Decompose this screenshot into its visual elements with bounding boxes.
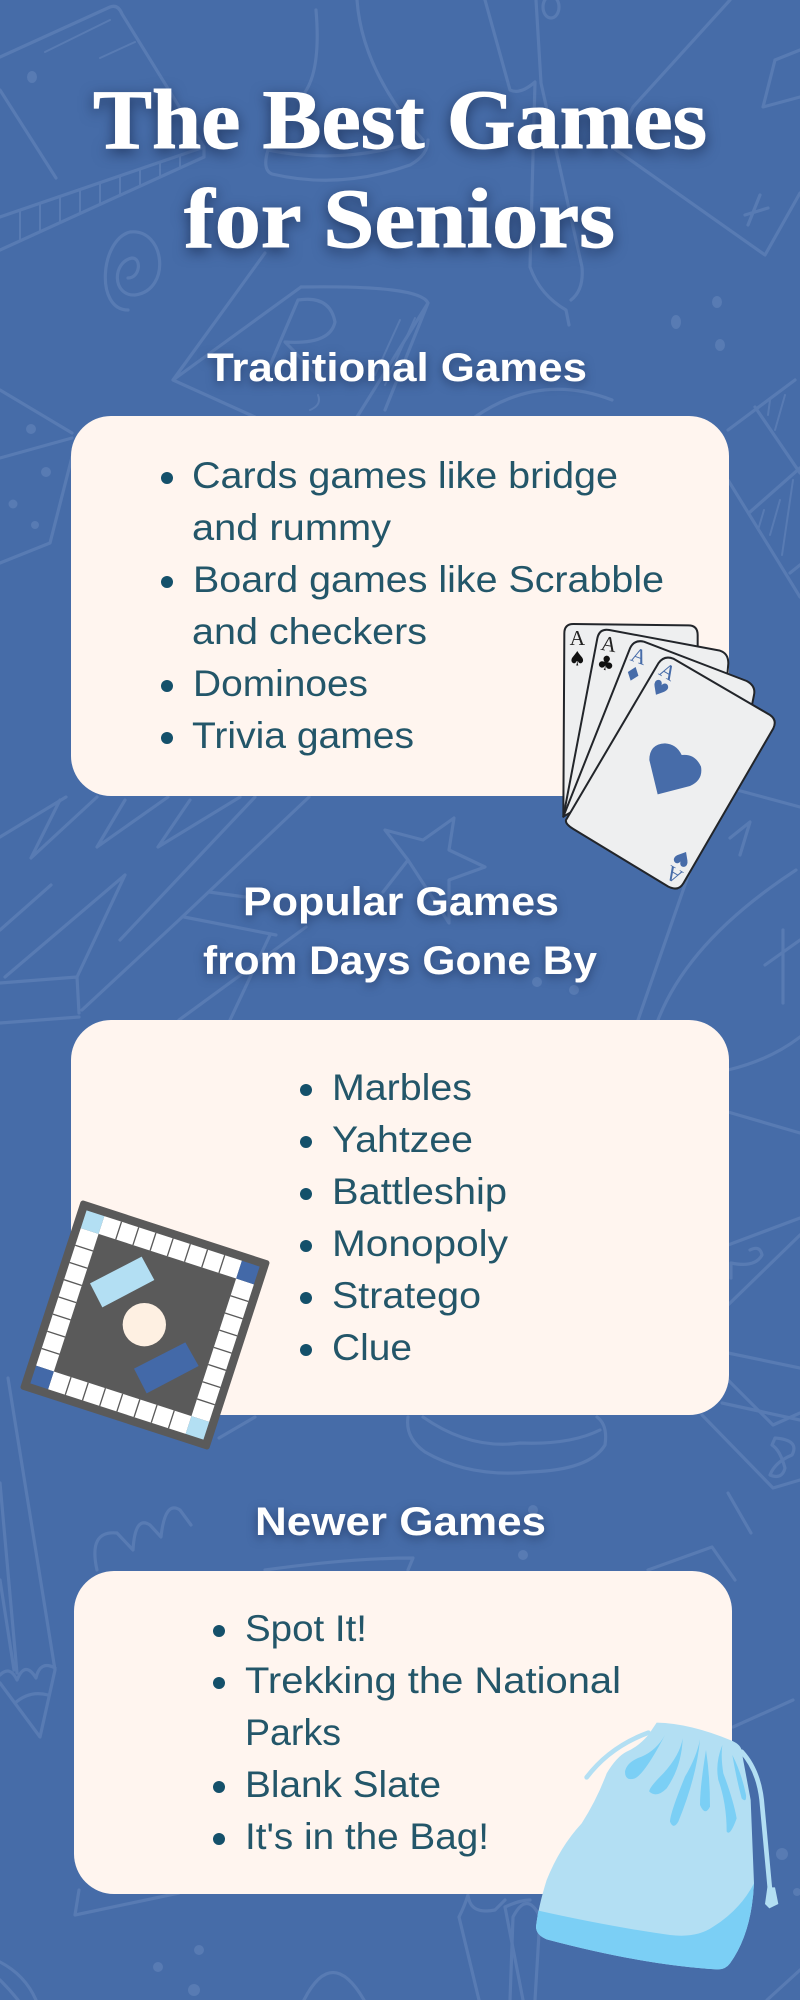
panel: popular games from days gone by: [71, 1020, 729, 1415]
bullet list: Battleship: [332, 1171, 507, 1212]
bullet list: Dominoes: [193, 663, 368, 704]
bullet list: Cards games like bridge: [192, 455, 618, 496]
heading: Popular Games from Days Gone By: [203, 880, 598, 983]
icon: fan of four aces: ♣: [595, 650, 617, 676]
icon: fan of four aces: ♦: [621, 660, 646, 688]
icon: fan of four aces: A: [570, 626, 586, 650]
bullet list: Monopoly: [332, 1223, 509, 1264]
bullet list: and checkers: [192, 611, 427, 652]
bullet list: Yahtzee: [332, 1119, 473, 1160]
panel background: [74, 1571, 732, 1894]
panel: newer games: [74, 1571, 732, 1894]
bullet list: Trekking the National: [245, 1660, 621, 1701]
bullet list: Spot It!: [245, 1608, 367, 1649]
heading: Popular Games from Days Gone By: Popular Games: [243, 880, 559, 924]
bullet list: [213, 1608, 621, 1857]
icon: fan of four aces: A: [628, 642, 651, 670]
heading: Traditional Games: Traditional Games: [207, 346, 587, 390]
icon: board game: [20, 1200, 270, 1450]
bullet list: Stratego: [332, 1275, 481, 1316]
bullet list: [161, 455, 664, 756]
heading: Newer Games: Newer Games: [255, 1500, 546, 1544]
icon: fan of four aces: ♠: [568, 647, 586, 671]
panel background: [71, 1020, 729, 1415]
bullet list: Parks: [245, 1712, 341, 1753]
title: [93, 73, 707, 266]
bullet list: Board games like Scrabble: [193, 559, 664, 600]
icon: fan of four aces: A: [599, 631, 619, 657]
bullet list: Marbles: [332, 1067, 472, 1108]
panel background: [71, 416, 729, 796]
icon: fan of four aces: [563, 624, 775, 889]
icon: fan of four aces: A: [655, 657, 681, 686]
icon: fan of four aces: ♥: [646, 674, 673, 703]
icon: drawstring bag: [536, 1723, 778, 1969]
title: for Seniors: [184, 172, 615, 266]
bullet list: Clue: [332, 1327, 412, 1368]
bullet list: and rummy: [192, 507, 392, 548]
icon: fan of four aces: ♥: [669, 843, 696, 873]
bullet list: Blank Slate: [245, 1764, 441, 1805]
bullet list: Trivia games: [192, 715, 414, 756]
icon: fan of four aces: A: [661, 860, 687, 889]
heading: Popular Games from Days Gone By: from Days Gone By: [203, 939, 598, 983]
title: The Best Games: [93, 73, 707, 167]
bullet list: [300, 1067, 509, 1368]
bullet list: It's in the Bag!: [245, 1816, 489, 1857]
panel: traditional games: [71, 416, 729, 796]
